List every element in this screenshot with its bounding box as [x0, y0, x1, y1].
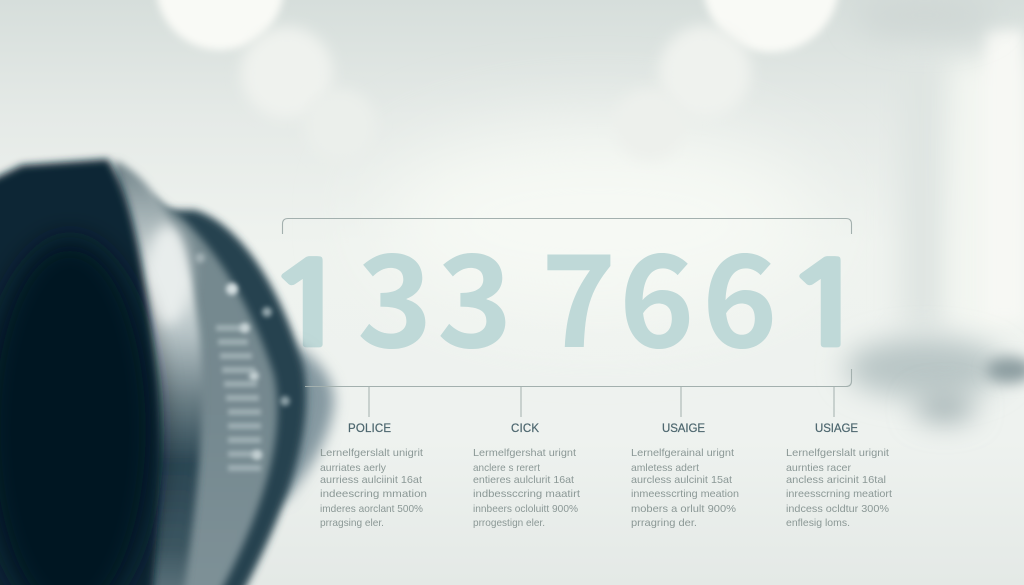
column: cick: CICK: [511, 423, 539, 435]
column: police: POLICE: [348, 423, 391, 435]
column: cick: prrogestign eler.: [473, 517, 545, 529]
large number: [264, 199, 873, 384]
column: usiage: USIAGE: [815, 423, 858, 435]
column: usage: USAIGE: [662, 423, 705, 435]
column: usiage: aurnties racer: [786, 462, 852, 474]
column: police: Lernelfgerslalt unigrit: [320, 447, 423, 459]
column: cick: innbeers ocloluitt 900%: [473, 503, 578, 515]
column: police: prragsing eler.: [320, 517, 384, 529]
column: usage: prragring der.: [631, 517, 697, 529]
column: usiage: inreesscrning meatiort: [786, 488, 892, 500]
large number: 3: [437, 199, 513, 384]
large number: 3: [357, 199, 433, 384]
column: police: aurriess aulciinit 16at: [320, 474, 422, 486]
column: usiage: ancless aricinit 16tal: [786, 474, 886, 486]
column: cick: indbessccring maatirt: [473, 488, 580, 500]
column: cick: [473, 387, 580, 529]
column: usiage: enflesig loms.: [786, 517, 850, 529]
number frame: [282, 218, 852, 386]
column: usage: aurcless aulcinit 15at: [631, 474, 732, 486]
column: cick: anclere s rerert: [473, 462, 540, 474]
column: usiage: indcess ocldtur 300%: [786, 503, 889, 515]
column: usage: [631, 387, 739, 529]
column: usage: inmeesscrting meation: [631, 488, 739, 500]
column: usiage: [786, 387, 892, 529]
large number: 6: [702, 199, 778, 384]
bokeh lights: [156, 0, 839, 161]
column: usage: mobers a orlult 900%: [631, 503, 736, 515]
column: police: imderes aorclant 500%: [320, 503, 423, 515]
column: police: indeescring mmation: [320, 488, 427, 500]
large number: 7: [541, 199, 617, 384]
column: cick: entieres aulclurit 16at: [473, 474, 574, 486]
column: police: [320, 387, 427, 529]
large number: 1: [782, 248, 873, 363]
lens grip ridges: [216, 325, 261, 471]
camera lens: [0, 150, 370, 585]
column: usage: Lernelfgerainal urignt: [631, 447, 734, 459]
large number: 1: [264, 248, 355, 363]
column: usage: amletess adert: [631, 462, 699, 474]
column: police: aurriates aerly: [320, 462, 387, 474]
lens ring highlights: [195, 253, 290, 460]
column: cick: Lermelfgershat urignt: [473, 447, 576, 459]
large number: 6: [619, 199, 695, 384]
column: usiage: Lernelfgerslalt urignit: [786, 447, 889, 459]
